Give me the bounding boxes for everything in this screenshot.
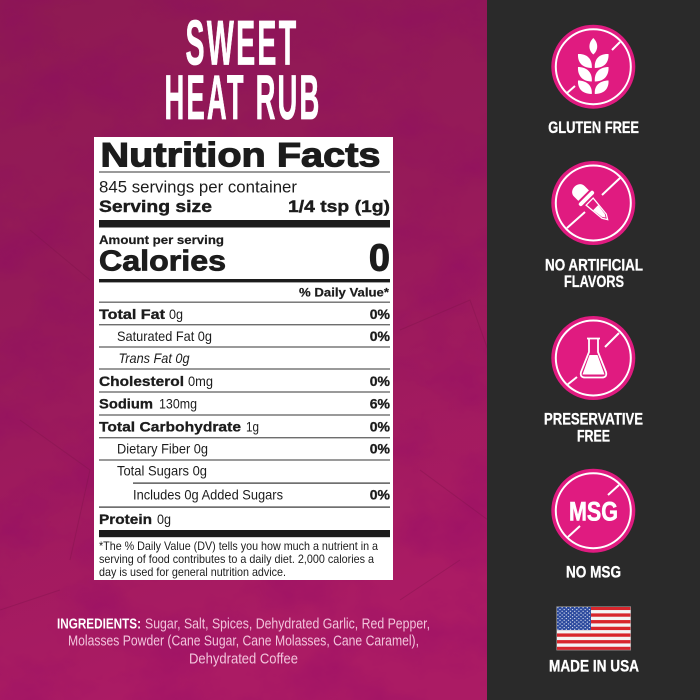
serving information: Serving size (99, 198, 212, 216)
ingredients (57, 615, 430, 667)
nutrient rows (99, 306, 391, 527)
nutrient rows: Total Fat (99, 306, 165, 322)
footnote: serving of food contributes to a daily diet. 2,000 calories a (99, 552, 374, 566)
panel: textured magenta background (0, 0, 488, 700)
serving information: 845 servings per container (99, 179, 298, 197)
ingredients: Molasses Powder (Cane Sugar, Cane Molasses, Cane Caramel), (68, 633, 419, 650)
nutrient rows: Trans Fat 0g (118, 350, 190, 366)
footnote: *The % Daily Value (DV) tells you how much a nutrient in a (99, 539, 378, 553)
daily value header: % Daily Value* (299, 286, 389, 300)
nutrient rows: 130mg (159, 396, 197, 412)
calories: 0 (369, 238, 390, 280)
nutrient rows: 0% (370, 486, 391, 502)
ingredients: Sugar, Salt, Spices, Dehydrated Garlic, Red Pepper, (145, 615, 430, 632)
label: preservative free: PRESERVATIVE (544, 411, 643, 429)
nutrient rows: 0% (370, 328, 391, 344)
nutrient rows: 0mg (188, 373, 213, 389)
label: no artificial flavors: FLAVORS (564, 273, 624, 291)
title (164, 8, 322, 133)
footnote (99, 539, 378, 579)
heading: Nutrition Facts: Nutrition Facts (100, 136, 380, 174)
label: preservative free (544, 411, 643, 446)
ingredients: INGREDIENTS: (57, 615, 141, 632)
nutrient rows: 0% (370, 419, 391, 435)
calories: Amount per serving (99, 233, 224, 247)
nutrient rows: Cholesterol (99, 373, 184, 389)
calories (99, 233, 390, 280)
nutrient rows: Protein (99, 511, 152, 527)
nutrient rows: 0g (169, 306, 183, 322)
text: HEAT RUB (164, 63, 322, 133)
nutrient rows: Sodium (99, 396, 153, 412)
nutrient rows: Dietary Fiber 0g (117, 441, 208, 457)
label: no artificial flavors (545, 257, 643, 291)
serving information: 1/4 tsp (1g) (288, 198, 390, 216)
rules between rows (99, 171, 390, 537)
nutrient rows: 6% (370, 396, 391, 412)
icon: no MSG: MSG (569, 497, 618, 527)
nutrient rows: Saturated Fat 0g (117, 328, 212, 344)
nutrient rows: 0g (157, 511, 171, 527)
nutrient rows: Total Sugars 0g (117, 463, 207, 479)
ingredients: Dehydrated Coffee (189, 650, 298, 667)
nutrient rows: Total Carbohydrate (99, 419, 241, 435)
calories: Calories (99, 246, 226, 278)
icon: no MSG (551, 469, 635, 553)
nutrient rows: 0% (370, 441, 391, 457)
label: gluten free: GLUTEN FREE (548, 119, 639, 137)
icon: gluten free wheat (551, 25, 635, 109)
nutrient rows: 0% (370, 306, 391, 322)
icon: preservative free flask (551, 316, 635, 400)
panel: nutrition facts label (94, 136, 393, 580)
label: no artificial flavors: NO ARTIFICIAL (545, 257, 643, 275)
label: preservative free: FREE (577, 428, 610, 446)
title: SWEET (186, 8, 298, 78)
footnote: day is used for general nutrition advice. (99, 565, 286, 579)
nutrient rows: 1g (246, 419, 259, 435)
nutrient rows: Includes 0g Added Sugars (133, 486, 283, 502)
icon: american flag (557, 607, 631, 650)
label: made in USA: MADE IN USA (549, 658, 639, 676)
panel: dark sidebar (487, 0, 700, 700)
serving information (99, 179, 390, 216)
label: no MSG: NO MSG (566, 564, 621, 582)
nutrient rows: 0% (370, 373, 391, 389)
icon: no artificial flavors dropper (551, 161, 635, 245)
